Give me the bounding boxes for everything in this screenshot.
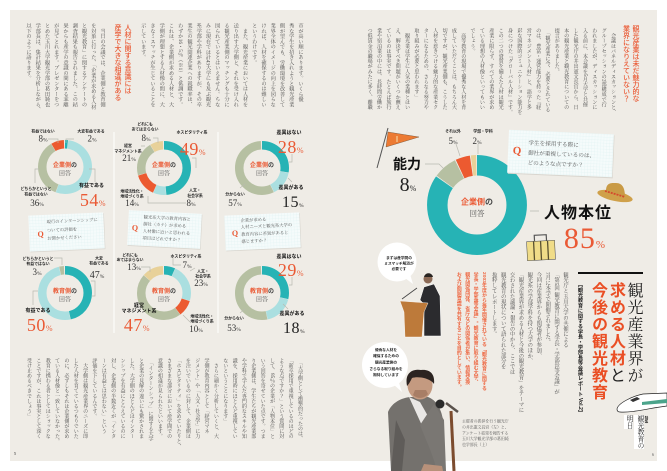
labels: company internship: 8% (38, 134, 48, 144)
body text: bottom left: を注いでいるのに対して、企業側は (185, 358, 191, 439)
body text: top left column: わずか16・5％（※1）と低調です。 (177, 23, 183, 107)
lead text: 観光系の学部学科を持つ大学のほか、 (526, 272, 532, 364)
lead text (491, 272, 568, 412)
body text: top left column: 業生の観光関連企業への就職率は、 (186, 23, 192, 107)
body text: bottom left: 「大学側として衝撃的だったのは、 (297, 363, 303, 441)
main title: 今後の観光教育 (589, 282, 606, 401)
page number right: 6 (652, 452, 655, 457)
body text: bottom left: さらに細かく分析していくと、大 (213, 363, 219, 439)
body text: top right column: ターになるための、さらなる努力や (423, 28, 429, 110)
labels: company education content: ホスピタリティ系 (177, 130, 208, 134)
body text: top right column: 観光業は学生に人気の業種とはい (404, 33, 410, 110)
icon: pennant flag (377, 128, 419, 168)
page number left: 5 (14, 451, 17, 456)
labels: company education content: 8% (186, 198, 196, 208)
body text: top right column: 高等教育の現場で優秀な人材を育 (460, 33, 466, 110)
labels: company education content (114, 122, 208, 208)
question box: education content: 人材像に近いと思われる (143, 227, 190, 237)
body text: top right column: 会議はパネルディスカッションと、 (610, 33, 616, 115)
body text: top right column: した観光庁の井出憲文長官から、日 (573, 28, 579, 110)
lead text: 「第5回 観光教育に関する学長・学部長等会議」が (553, 272, 559, 395)
labels: company education content: 49% (180, 139, 206, 159)
body text: top left column: 送り出す大学側と、それを受け入れ (232, 23, 238, 107)
lead text: 観光教育の現状について語られた部分を (500, 272, 506, 369)
labels: company internship: 有益ではない (24, 192, 48, 196)
heading: is tourism attractive: 観光産業は未だ魅力的な (632, 25, 639, 102)
body text: conference survey: 調査結果も報告されました。この結 (71, 23, 77, 107)
question box: internship: 現行のインターンシップに (46, 216, 98, 225)
labels: education content: 23% (194, 278, 208, 288)
body text: top left column: きなミスマッチが生じていることを (149, 23, 155, 107)
donut chart: education internship (42, 270, 88, 316)
labels: company education content: マネジメント系 (114, 148, 142, 154)
photo caption: 也学部長（上） (462, 442, 489, 447)
donut chart: company internship (42, 144, 88, 190)
body text: top right column: 成していただくことは、もちろん大 (451, 28, 457, 110)
labels: company internship: 有益ではない (31, 128, 55, 134)
section tag second line: 明日 (625, 415, 632, 429)
body text: top right column: 提言がありました。 (554, 28, 560, 74)
body text: top right column: 身につけた『グローバル人材』です。 (507, 28, 513, 115)
body text: bottom left: 大学側は観光産業界のニーズに即 (82, 363, 88, 439)
large donut chart: hiring criteria (437, 165, 517, 245)
body text: bottom left: 「ホスピタリティ」を求めていたりと、 (176, 358, 182, 449)
body text: bottom left: 対し、企業側の半数近くが「インタ (110, 358, 116, 439)
labels: education gap perception: 教育側の (250, 287, 274, 295)
question box: education content: 観光系大学の教育内容と (143, 213, 191, 223)
question box: education content: Q (132, 223, 138, 233)
body text: top left column: ければ、人材を確保するのは難しい (260, 23, 266, 107)
labels: company education content: 8% (141, 133, 151, 143)
labels: large donut: 学部・学科 (473, 128, 493, 134)
lead text: 今回は産業界からも関係者が参加、 (535, 272, 541, 358)
body text: bottom left: と企業の見解の違いにも驚かされま (138, 358, 144, 439)
labels: education internship: 50% (27, 315, 53, 335)
body text: top left column: 側が望んでも、労働環境を改善して (278, 23, 284, 107)
body text: bottom left: や学科で学んだ専門的なスキルや知 (241, 358, 247, 439)
question box: gap perception: Q (232, 229, 238, 238)
body text: bottom left: ことですが、これは事実として深く (35, 358, 41, 439)
question box: gap perception: 教育内容に差異があると (241, 229, 289, 238)
labels: education internship: 有益ではない (26, 261, 50, 266)
body text: conference survey: とめた玉川大学観光学部の葛田純也 (44, 23, 50, 107)
labels: education content: 地域づくり系 (190, 318, 214, 324)
body text: bottom left: して、85％の企業が「人物本位」と (269, 358, 275, 439)
body text: top left column: というわけです。 (251, 23, 257, 65)
labels: large donut: 企業側の (461, 196, 493, 206)
labels: education content: 人文・ (197, 268, 209, 274)
body text: top right column: 彩な国際的コミュニケーション能力を (516, 28, 522, 115)
body text: top right column: 本の観光産業と観光教育についての (563, 28, 569, 110)
heading: attitude gap between industry and academia: 産学で大きな相違がある (114, 24, 121, 101)
body text: top right column: 営マネジメント人材』と、語学と多 (526, 28, 532, 110)
body text: top right column: グループセッションの2部構成で行 (601, 28, 607, 107)
labels: education content: 地域活性化・ (190, 314, 214, 318)
lead text: 「観光産業界が求める人材と今後の観光教育」をテーマに (517, 272, 523, 412)
body text: bottom left: 「新卒採用で重視しているのはどの (288, 358, 294, 439)
photo caption: アンケート結果を報告する (462, 430, 509, 436)
body text: top left column: また、観光産業においては人材を (242, 28, 248, 107)
body text: top left column: 業界全体のイメージの向上を図らな (269, 23, 275, 107)
heading: attitude gap between industry and academia (114, 24, 132, 101)
labels: company internship: 2% (87, 134, 97, 144)
labels: education internship: 有益である (89, 260, 109, 266)
body text: bottom left: 評価を下しているんです。 (91, 358, 97, 419)
labels: company education content: 回答 (158, 170, 170, 178)
labels: education gap perception: 分からない (224, 316, 244, 320)
orange note: 学長・学部長等会議」。観光教育に取り組む大学、 (473, 272, 478, 385)
labels: education gap perception: 差異がある (279, 310, 305, 317)
question box: gap perception: 人材ニーズと観光系大学の (241, 221, 292, 230)
labels: company education content: 14% (125, 198, 139, 208)
labels: education internship: どちらかというと (22, 256, 54, 261)
labels: large donut: それ以外 (445, 128, 461, 134)
question box: hiring criteria: どのような点ですか？ (527, 159, 584, 169)
labels: education gap perception: 29% (278, 260, 304, 280)
body text: top right column: 人材を惹きつける魅力的な産業セク (432, 28, 438, 110)
orange note: 観光関係団体、省庁などの関係者が集い、情報交換 (464, 272, 469, 385)
labels: company internship: 有益である (79, 182, 104, 189)
main title: 観光産業界が (625, 282, 642, 384)
question box: internship (28, 212, 105, 252)
labels: education internship: 教育側の (53, 287, 77, 295)
body text: conference survey (25, 23, 106, 112)
donut chart: company gap perception (239, 145, 285, 191)
body text: top right column: ているのは事実です。たとえば旅行 (385, 28, 391, 110)
speech bubble: mismatch: ミスマッチ解消が (384, 260, 414, 266)
question box: education content: 項目はどれですか？ (142, 234, 181, 243)
labels: large donut: 8% (400, 174, 417, 196)
body text: top left column (140, 23, 304, 107)
photo: speaker at podium (400, 273, 441, 337)
labels: education gap perception: 53% (227, 323, 241, 333)
question box: gap perception: 感じますか？ (241, 237, 267, 245)
donut chart: education gap perception (239, 270, 285, 316)
labels: education content: 社会学系 (195, 274, 211, 278)
body text: bottom left: 学側が教育内容として「経営マネ (204, 358, 210, 434)
body text: top left column: 図られているとはいえません。ちな (214, 23, 220, 107)
orange note: 2003年度から毎年開催されている「観光教育に関する (481, 272, 486, 391)
body text: top right column: え、解決すべき問題がいくつか蘸え (395, 28, 401, 110)
title rule (578, 272, 643, 274)
body text: conference survey: と観光教育」に関するアンケートの (80, 23, 86, 107)
labels: company gap perception: 分からない (225, 192, 245, 196)
photo: speaker at microphone (388, 370, 458, 471)
body text: bottom left: した人材を育てているつもりでいた (73, 358, 79, 439)
lead text: 抜粋してレポートします。 (491, 272, 497, 337)
speech bubble: mismatch: 必要です (392, 266, 407, 271)
title subtitle: 【観光教育に関する学長・学部長等会議レポート Vol.2】 (577, 282, 583, 415)
labels: education content: 47% (124, 315, 150, 335)
labels: education content: 13% (127, 262, 141, 272)
body text: conference survey: 学部長は、集計結果を分析しながら、 (34, 23, 40, 112)
question box: education content (127, 210, 202, 250)
speech bubble: talent: さらなる取り組みを (369, 366, 403, 371)
labels: education content: どれにも (122, 252, 138, 258)
labels: education content: 教育側の (152, 287, 176, 295)
labels: company education content: 地域活性化・ (120, 188, 144, 194)
speech bubble: talent: 期待しています (373, 372, 399, 377)
body text: top right column: でしょう。 (470, 28, 476, 54)
labels: education content: 経営 (134, 302, 144, 309)
labels: large donut: 2% (472, 136, 482, 146)
labels: company internship: 大変有益である (77, 128, 105, 134)
labels: company gap perception (225, 129, 304, 211)
labels: education gap perception: 18% (283, 320, 305, 337)
labels: company education content: 経営 (124, 143, 132, 148)
main title (589, 282, 643, 401)
body text: bottom left: 識を、採用時にほとんど重視してい (232, 358, 238, 439)
body text: top right column: 産業に限らず、すべての業界が求め (488, 28, 494, 110)
labels: company gap perception: 28% (278, 137, 304, 157)
speech bubble: talent: 優秀な人材を (375, 347, 397, 352)
question box: hiring criteria (507, 130, 615, 178)
speech bubble: talent: 確保するための (373, 353, 399, 358)
labels: company education content: 21% (122, 153, 136, 163)
heading: is tourism attractive: 業界になりえていない？ (622, 25, 630, 102)
body text: bottom left: いう回答を寄せていた点です。つま (260, 358, 266, 439)
body text: top left column: る観光産業側のマッチングも十分に (223, 23, 229, 107)
body text: conference survey: を対象に行った、「企業が求める人材 (90, 23, 96, 110)
labels: company gap perception: 回答 (256, 170, 268, 178)
orange note (456, 272, 487, 391)
labels: education content: あてはまらない (116, 257, 144, 262)
body text: top right column: つ低賃金の職場がみたに多く、離職 (367, 28, 373, 110)
body text: bottom left: ないということになります」 (222, 358, 228, 424)
question box: internship: Q (37, 229, 44, 239)
labels: education gap perception: 差異はない (276, 253, 302, 260)
body text: bottom left: 教育に携わる者としてはショックな (45, 358, 51, 439)
body text: conference survey: 果からも産学の意識の間にある乖離 (62, 23, 68, 107)
labels: education content: マネジメント系 (121, 308, 157, 314)
heading: attitude gap between industry and academia: 人材に関する意識には (124, 24, 131, 94)
labels: company gap perception: 差異がある (278, 184, 304, 191)
body text: bottom left: 意識の相違が見られたといいます。 (157, 358, 163, 439)
question box: gap perception (224, 212, 301, 251)
body text: top right column: 「観光産業に今、必要とされている (544, 33, 550, 112)
body text: top right column: 入る前に、本会議を5月大学と共催 (582, 28, 588, 107)
labels: company internship (20, 128, 106, 210)
body text: top right column: 取り組みが必要と思われます」 (413, 28, 419, 99)
body text: top left column: 学側が理想とする人材像の間に、大 (158, 23, 164, 107)
body text: top left column: 市が高い順にあります。いくら優 (297, 23, 303, 102)
body text: bottom left (26, 358, 303, 449)
labels: company internship: 36% (30, 198, 44, 208)
section tag: 観光教育の (636, 415, 643, 449)
labels: company internship: 54% (80, 190, 106, 210)
photo caption: 主催者の挨拶を行う観光庁 (462, 418, 509, 424)
labels: company education content: 企業側の (152, 161, 176, 169)
body text: bottom left: ンシップを有益にとらえているのに (119, 358, 125, 439)
icon: straw hat (596, 183, 634, 205)
labels: company education content: 社会学系 (187, 193, 203, 198)
labels: company gap perception: 15% (282, 194, 304, 211)
question box: hiring criteria: Q (513, 145, 522, 157)
lead text: 交わされた議論・報告の中から、ここでは (509, 272, 515, 375)
lead text: 観光庁と玉川大学の共催による (562, 272, 568, 348)
labels: company internship: 企業側の (53, 161, 77, 169)
body text: conference survey: 以下のように語ります。 (25, 23, 31, 81)
icon: bullet train (617, 393, 667, 412)
labels: company gap perception: 企業側の (250, 161, 274, 169)
lead text: 7月に本学で開催されました。 (544, 272, 550, 345)
body text: top left column: みに現在では計43大学にも及ぶ観光 (204, 23, 210, 107)
labels: company gap perception: 57% (228, 198, 242, 208)
labels: education internship: 回答 (59, 296, 71, 304)
labels: education content: 7% (182, 260, 192, 270)
donut chart: company education content (141, 145, 187, 191)
question box: gap perception: 企業が求める (240, 216, 266, 224)
labels: large donut: 能力 (393, 156, 421, 172)
labels: large donut: 回答 (470, 208, 485, 218)
body text: top left column: 系学部や学科がありますが、その卒 (195, 23, 201, 107)
body text: bottom left: した。大学側のほとんどはインター (129, 358, 135, 439)
labels: education content: ホスピタリティ系 (171, 254, 202, 258)
photo caption (462, 418, 509, 447)
body text: top right column: われましたが、ディスカッションに (591, 28, 597, 110)
labels: education internship (22, 256, 109, 335)
question box: education content: 御社（カテ）が求める (143, 220, 186, 230)
labels: company education content: 人文・ (189, 188, 201, 192)
body text: top right column: 切ですが、観光産業側も、こうした (442, 28, 448, 110)
labels: company education content: どれにも (137, 122, 153, 126)
photo caption: 玉川大学観光学部の葛田純 (462, 436, 509, 441)
body text: top left column: これは、企業側が求める人材と、大 (168, 23, 174, 107)
body text: bottom left: 受け止めるべきでしょう」 (26, 358, 32, 419)
orange note: および問題意識を共有することを目的としています。 (456, 272, 461, 390)
icon: suitcase (526, 234, 556, 261)
labels: education content (116, 252, 214, 335)
body text: bottom left: ている人材像と一致していなかった。 (54, 358, 60, 444)
body text: conference survey: 当日の会議では、企業側と教育側 (99, 28, 105, 107)
body text: bottom left: ような点ですか？」という質問に対 (278, 358, 284, 439)
body text: top right column (367, 28, 616, 115)
body text: top left column: 示しています。 (140, 23, 146, 60)
labels: company internship: どちらかというと (20, 186, 52, 191)
labels: education gap perception: 回答 (256, 296, 268, 304)
body text: bottom left: 「インターンシップ」に関する大学 (148, 363, 154, 441)
section label: 特集 (645, 416, 649, 423)
speech bubble: talent (362, 342, 408, 392)
labels: education content: 回答 (158, 296, 170, 304)
body text: top right column: ている理想の人材像といってもいい (479, 28, 485, 110)
labels: education content: 10% (189, 324, 203, 334)
labels: large donut (393, 128, 612, 255)
body text: bottom left: さまざまな部分において産学間での (166, 358, 172, 439)
labels: education internship: 3% (32, 267, 42, 277)
speech bubble: mismatch: まずは産学間の (386, 255, 412, 260)
main title: 求める人材 と (607, 282, 624, 384)
labels: company education content: あてはまらない (131, 126, 159, 132)
labels: education internship: 大変 (95, 256, 103, 260)
labels: education internship: 有益である (26, 307, 50, 314)
labels: company education content: 地域づくり系 (120, 194, 144, 198)
body text: bottom left: のに、必ずしもそれは企業側が求め (63, 358, 69, 439)
speech bubble: mismatch (378, 242, 416, 284)
body text: top right column: この二つの資質を備えた人材は観光 (498, 28, 504, 110)
photo caption: の井出憲文長官（左）と、 (462, 424, 509, 430)
labels: company internship: 回答 (59, 170, 71, 178)
donut chart: education content (141, 270, 187, 316)
body text: top right column: 業や宿泊業の中には、長時間労働か (376, 28, 382, 110)
labels: education internship: 47% (90, 270, 105, 281)
labels: large donut: 85% (564, 222, 606, 255)
body text: bottom left: り企業側は、学生たちが観光産業部 (250, 358, 256, 439)
body text: bottom left: ーンは有益とは思わない」という (101, 358, 107, 434)
labels: education gap perception (224, 253, 305, 337)
question box: internship: ついての評価を (47, 226, 77, 234)
question box: internship: お聞かせください (47, 233, 82, 242)
labels: large donut: 5% (448, 136, 458, 146)
body text: bottom left: ジメント」や「人文・社会学」に力 (194, 358, 200, 439)
body text: top left column: 秀な学生を招き入れようと観光産業 (288, 23, 294, 107)
speech bubble: talent: 観光産業側の (375, 360, 397, 364)
heading: is tourism attractive (622, 25, 640, 102)
question box: hiring criteria: 御社が重視しているのは、 (528, 149, 595, 160)
question box: hiring criteria: 学生を採用する際に (528, 139, 579, 149)
body text: top right column: のは、豊富・運営能力を持った『経 (535, 28, 541, 110)
labels: company gap perception: 差異はない (276, 129, 302, 136)
labels: large donut: 人物本位 (544, 204, 612, 222)
body text: conference survey: が見てとれます。プレゼンターをつ (53, 23, 59, 107)
